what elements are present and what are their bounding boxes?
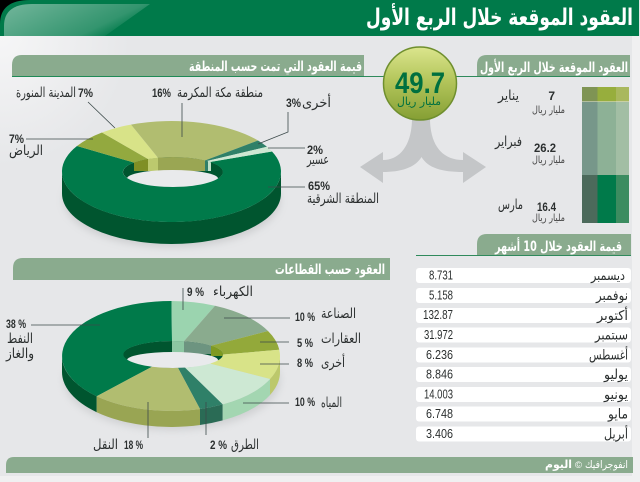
month labels: 26.2 <box>534 141 556 155</box>
region labels: 16% <box>152 86 171 100</box>
region labels: الرياض <box>9 143 43 159</box>
table: 10 months values: نوفمبر <box>595 288 628 304</box>
donut chart: sectors <box>62 301 280 430</box>
table: 10 months values: 8.846 <box>426 368 453 382</box>
side: oil and gas <box>62 356 97 412</box>
month labels: فبراير <box>494 134 522 150</box>
side: water <box>223 379 270 420</box>
region labels: 65% <box>308 179 330 193</box>
segment: eastern region 65% <box>62 146 281 222</box>
month labels: 7 <box>548 89 555 103</box>
donut hole wall <box>123 157 223 187</box>
segment: other <box>205 140 267 161</box>
segment: asir <box>207 147 272 162</box>
total value circle: 49.7 <box>395 67 445 100</box>
segment: riyadh <box>77 132 148 163</box>
table: 10 months values: أكتوبر <box>596 306 628 324</box>
footer band with credit: انفوجرافيك <box>585 459 628 471</box>
table: 10 months values: مايو <box>607 406 628 422</box>
month labels: مليار ريال <box>532 105 565 116</box>
table: 10 months values: أبريل <box>604 424 628 442</box>
table: 10 months values: 14.003 <box>424 388 453 402</box>
side: transport <box>97 396 200 427</box>
panel heading: 10 months <box>416 234 631 256</box>
region labels: المدينة المنورة <box>16 85 76 101</box>
segment: real estate 5% <box>211 331 279 354</box>
hole wall <box>123 341 223 368</box>
donut chart: regions <box>62 121 281 247</box>
segment: water 10% <box>185 364 270 404</box>
table: 10 months values: يوليو <box>603 367 628 383</box>
region labels <box>9 85 379 207</box>
sector labels: 8 % <box>297 356 313 370</box>
table: 10 months values: ديسمبر <box>590 268 625 284</box>
table: 10 months values <box>416 268 631 442</box>
footer band with credit: اليوم <box>545 458 572 471</box>
region labels: 7% <box>9 132 24 146</box>
segment: oil and gas 38% <box>62 301 172 396</box>
region labels: 2% <box>307 143 323 157</box>
region labels: عسير <box>306 152 329 168</box>
table: 10 months values: 132.87 <box>423 308 453 322</box>
region labels: 7% <box>78 86 93 100</box>
month labels <box>494 88 565 224</box>
table: 10 months values: 6.236 <box>426 348 453 362</box>
side: other <box>270 356 280 395</box>
region labels: 3% <box>286 96 301 110</box>
footer band with credit <box>6 457 633 473</box>
table: 10 months values: 6.748 <box>426 407 453 421</box>
month labels: مليار ريال <box>532 213 565 224</box>
leader lines: sectors <box>31 288 290 438</box>
month labels: 16.4 <box>537 200 556 214</box>
donut side <box>62 172 281 244</box>
sector labels: 38 % <box>6 317 26 331</box>
sector labels: النفط <box>7 331 33 347</box>
sector labels: 2 % <box>210 438 227 452</box>
total value circle <box>384 47 456 120</box>
table: 10 months values: 3.406 <box>426 427 453 441</box>
leader lines: regions <box>26 102 305 187</box>
sector labels: 9 % <box>187 285 204 299</box>
sector labels: 10 % <box>295 310 315 324</box>
segment: other 8% <box>210 350 280 379</box>
month labels: مارس <box>498 197 523 213</box>
footer band with credit: © <box>575 460 582 471</box>
icon: split arrow <box>360 118 486 183</box>
sector labels: 5 % <box>297 336 313 350</box>
month labels: مليار ريال <box>532 155 565 166</box>
table: 10 months values: 8.731 <box>429 268 453 282</box>
segment: transport 18% <box>97 367 200 411</box>
segment: roads 2% <box>178 368 223 409</box>
table: 10 months values: 31.972 <box>424 328 453 342</box>
sector labels: الكهرباء <box>213 284 253 300</box>
sector labels: الطرق <box>231 437 259 453</box>
panel heading: contracts by sector <box>13 258 390 280</box>
table: 10 months values: أغسطس <box>589 346 628 364</box>
region labels: منطقة مكة المكرمة <box>177 85 263 101</box>
table: 10 months values: 5.158 <box>429 288 453 302</box>
stacked monthly bar <box>582 87 629 223</box>
sector labels: الصناعة <box>321 306 356 322</box>
sector labels <box>5 284 361 453</box>
sector labels: 18 % <box>124 438 143 452</box>
table: 10 months values: سبتمبر <box>594 328 628 344</box>
sector labels: العقارات <box>321 331 361 347</box>
segment: makkah <box>131 121 258 160</box>
month labels: يناير <box>497 88 519 104</box>
sector labels: النقل <box>93 437 118 453</box>
panel heading: Q1 contracts <box>455 55 630 76</box>
sector labels: 10 % <box>295 395 315 409</box>
table: 10 months values: يونيو <box>603 387 628 403</box>
panel heading: contracts by sector: العقود حسب القطاعات <box>275 262 385 278</box>
side: roads <box>200 404 223 425</box>
segment: electricity 9% <box>172 301 215 341</box>
header band with title <box>0 0 639 36</box>
panel heading: contracts by region <box>12 55 410 77</box>
region labels: المنطقة الشرقية <box>307 191 379 207</box>
segment: madinah <box>102 125 158 159</box>
total value circle: مليار ريال <box>397 94 441 109</box>
sector labels: أخرى <box>321 353 345 371</box>
sector labels: المياه <box>321 395 342 411</box>
sector labels: والغاز <box>5 346 34 362</box>
panel heading: contracts by region: قيمة العقود التي تمت حسب المنطقة <box>189 59 362 75</box>
region labels: أخرى <box>302 93 331 111</box>
segment: industry 10% <box>184 306 268 346</box>
